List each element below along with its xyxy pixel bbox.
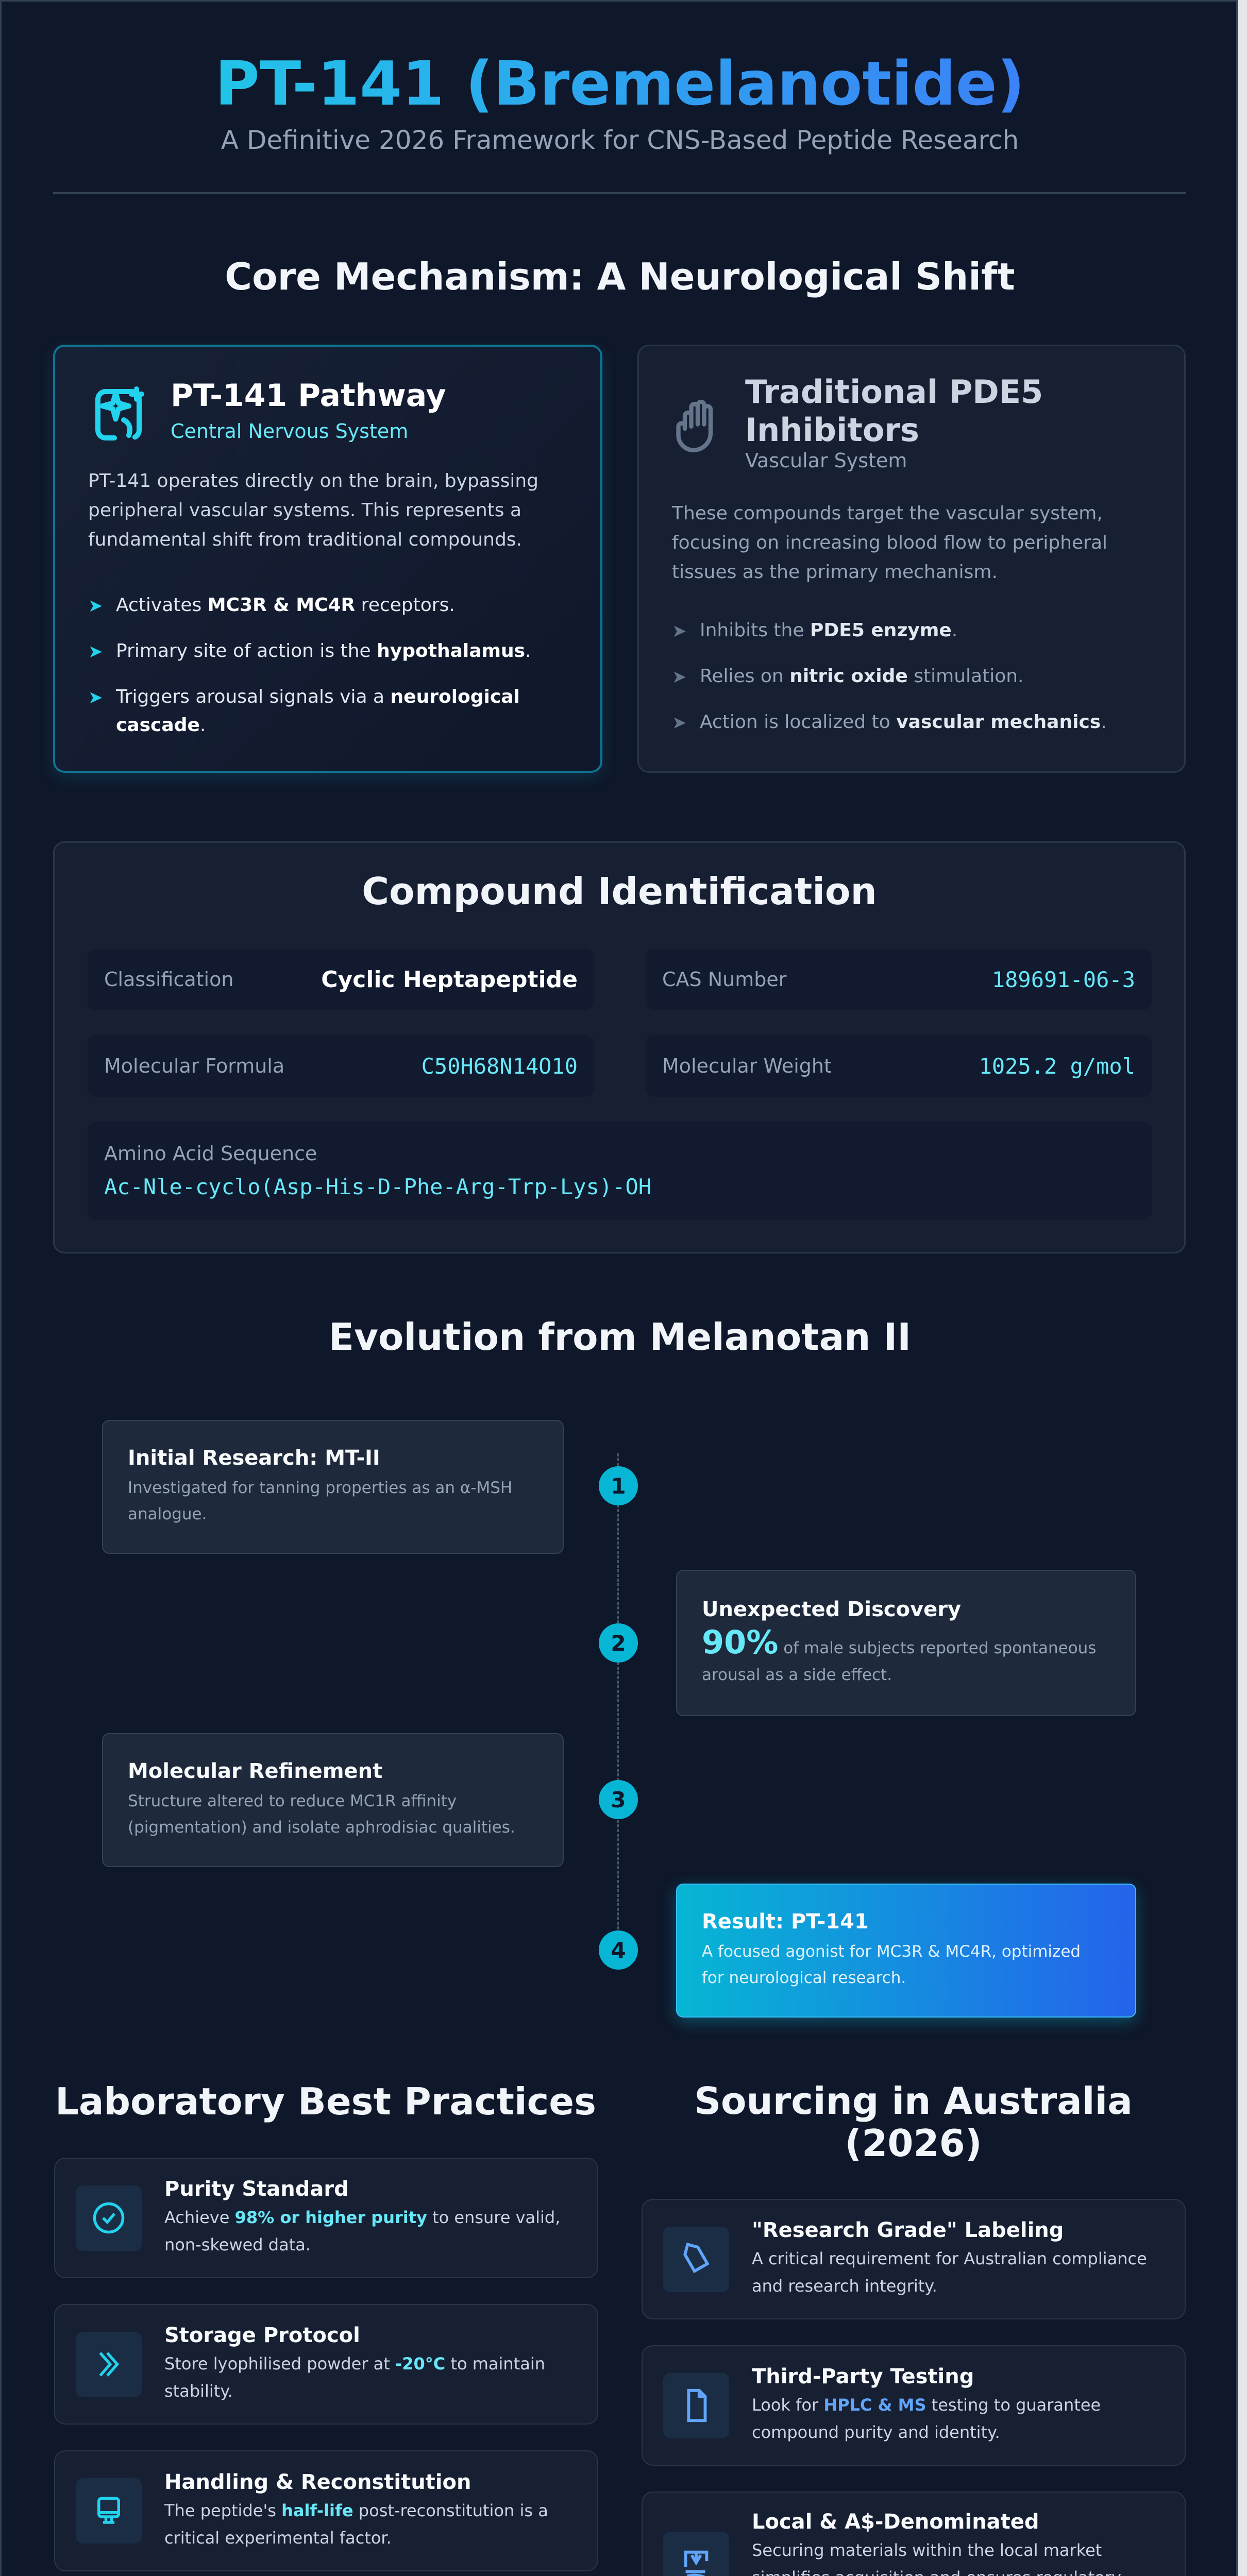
heading: evolution: Evolution from Melanotan II	[329, 1315, 911, 1359]
icon: download	[663, 2532, 729, 2576]
compound heading: Compound Identification	[362, 870, 877, 913]
cell: CAS: 189691-06-3	[992, 967, 1135, 992]
pathway bullets: ➤	[88, 687, 103, 708]
practice: storage	[54, 2304, 598, 2425]
timeline card 3: Structure altered to reduce MC1R affinity (pigmentation) and isolate aphrodisiac qualities.	[128, 1792, 515, 1837]
icon: tag	[663, 2227, 729, 2292]
PDE5 bullets: ➤	[672, 621, 686, 641]
cell: amino acid sequence: Ac-Nle-cyclo(Asp-His-D-Phe-Arg-Trp-Lys)-OH	[104, 1174, 651, 1199]
practice: purity	[54, 2158, 598, 2278]
cell: CAS	[646, 949, 1152, 1010]
timeline card 2	[676, 1570, 1136, 1716]
pathway bullets	[88, 595, 531, 736]
sourcing: testing	[642, 2345, 1186, 2466]
heading: lab practices: Laboratory Best Practices	[55, 2080, 596, 2123]
timeline card 4: Result: PT-141	[702, 1910, 869, 1934]
timeline card 2: 90% of male subjects reported spontaneous arousal as a side effect.	[702, 1623, 1096, 1684]
cell: classification	[88, 949, 594, 1010]
panel: PT-141 pathway	[53, 345, 602, 773]
timeline card 2: Unexpected Discovery	[702, 1598, 961, 1621]
cell: formula: C50H68N14O10	[422, 1053, 578, 1079]
cell: amino acid sequence	[88, 1122, 1152, 1220]
practice: storage: Storage Protocol	[164, 2324, 360, 2347]
step 4: 4	[611, 1937, 626, 1963]
timeline card 1: Investigated for tanning properties as an α-MSH analogue.	[128, 1479, 512, 1523]
panel: compound identification	[53, 841, 1186, 1253]
cell: amino acid sequence: Amino Acid Sequence	[104, 1142, 317, 1165]
cell: classification: Cyclic Heptapeptide	[321, 967, 578, 992]
practice: purity: Purity Standard	[164, 2177, 349, 2201]
PDE5 bullets: Action is localized to vascular mechanics.	[700, 711, 1107, 733]
timeline card 4: A focused agonist for MC3R & MC4R, optimized for neurological research.	[702, 1942, 1081, 1987]
timeline card 3	[102, 1733, 564, 1867]
PDE5 bullets: Relies on nitric oxide stimulation.	[700, 666, 1023, 687]
step 1: 1	[611, 1473, 626, 1498]
pathway title: PT-141 Pathway	[171, 378, 446, 414]
sourcing: labeling: A critical requirement for Australian compliance and research integrity.	[752, 2249, 1147, 2296]
title: PT-141 (Bremelanotide)	[215, 48, 1025, 119]
cell: formula: Molecular Formula	[104, 1055, 284, 1077]
practice: handling	[54, 2450, 598, 2571]
panel: traditional PDE5	[637, 345, 1186, 773]
cell: weight: Molecular Weight	[662, 1055, 832, 1077]
icon: chevrons	[76, 2332, 142, 2397]
timeline card 3: Molecular Refinement	[128, 1759, 382, 1783]
icon: document	[663, 2373, 729, 2438]
PDE5 title	[745, 373, 1043, 449]
step 3: 3	[611, 1787, 626, 1812]
sourcing: testing: Look for HPLC & MS testing to guarantee compound purity and identity.	[752, 2395, 1101, 2442]
PDE5 bullets: ➤	[672, 713, 686, 733]
pathway bullets: ➤	[88, 596, 103, 616]
sourcing: local	[642, 2492, 1186, 2576]
practice: purity: Achieve 98% or higher purity to ensure valid, non-skewed data.	[164, 2208, 560, 2255]
timeline card 4	[676, 1884, 1136, 2018]
step 1	[599, 1466, 638, 1505]
timeline card 1	[102, 1420, 564, 1554]
step 3	[599, 1780, 638, 1819]
icon: check	[76, 2185, 142, 2250]
subtitle: A Definitive 2026 Framework for CNS-Based Peptide Research	[221, 125, 1019, 155]
timeline line	[617, 1453, 619, 1948]
sourcing: labeling: "Research Grade" Labeling	[752, 2218, 1064, 2242]
heading: core mechanism: Core Mechanism: A Neurological Shift	[225, 255, 1015, 298]
cell: CAS: CAS Number	[662, 968, 786, 991]
pathway bullets: ➤	[88, 641, 103, 662]
cell: weight	[646, 1035, 1152, 1097]
cell: weight: 1025.2 g/mol	[979, 1053, 1135, 1079]
icon: sparkles	[95, 386, 144, 440]
icon: monitor	[76, 2478, 142, 2544]
practice: handling: The peptide's half-life post-reconstitution is a critical experimental factor.	[164, 2501, 548, 2547]
sourcing: testing: Third-Party Testing	[752, 2365, 974, 2388]
sourcing: local: Local & A$-Denominated	[752, 2510, 1039, 2534]
PDE5 bullets: Inhibits the PDE5 enzyme.	[700, 620, 957, 641]
cell: formula	[88, 1035, 594, 1097]
icon: hand	[676, 400, 713, 452]
timeline card 1: Initial Research: MT-II	[128, 1446, 380, 1470]
step 2: 2	[611, 1630, 626, 1656]
pathway text: PT-141 operates directly on the brain, bypassing peripheral vascular systems. This represents a fundamental shift from traditional compounds.	[88, 470, 538, 550]
practice: handling: Handling & Reconstitution	[164, 2470, 471, 2494]
pathway subtitle: Central Nervous System	[171, 420, 408, 443]
PDE5 text: These compounds target the vascular system, focusing on increasing blood flow to peripheral tissues as the primary mechanism.	[672, 503, 1107, 583]
sourcing: labeling	[642, 2199, 1186, 2319]
PDE5 subtitle: Vascular System	[745, 449, 907, 472]
practice: storage: Store lyophilised powder at -20°C to maintain stability.	[164, 2354, 545, 2401]
step 4	[599, 1930, 638, 1970]
PDE5 bullets: ➤	[672, 667, 686, 687]
pathway bullets: Primary site of action is the hypothalamus.	[116, 640, 531, 662]
PDE5 title: Traditional PDE5	[745, 373, 1043, 411]
pathway bullets: Triggers arousal signals via a neurological cascade.	[116, 686, 520, 736]
PDE5 title: Inhibitors	[745, 411, 919, 449]
heading: sourcing: Sourcing in Australia (2026)	[694, 2079, 1133, 2165]
cell: classification: Classification	[104, 968, 233, 991]
step 2	[599, 1623, 638, 1663]
pathway bullets: Activates MC3R & MC4R receptors.	[116, 595, 455, 616]
PDE5 bullets	[672, 620, 1107, 733]
